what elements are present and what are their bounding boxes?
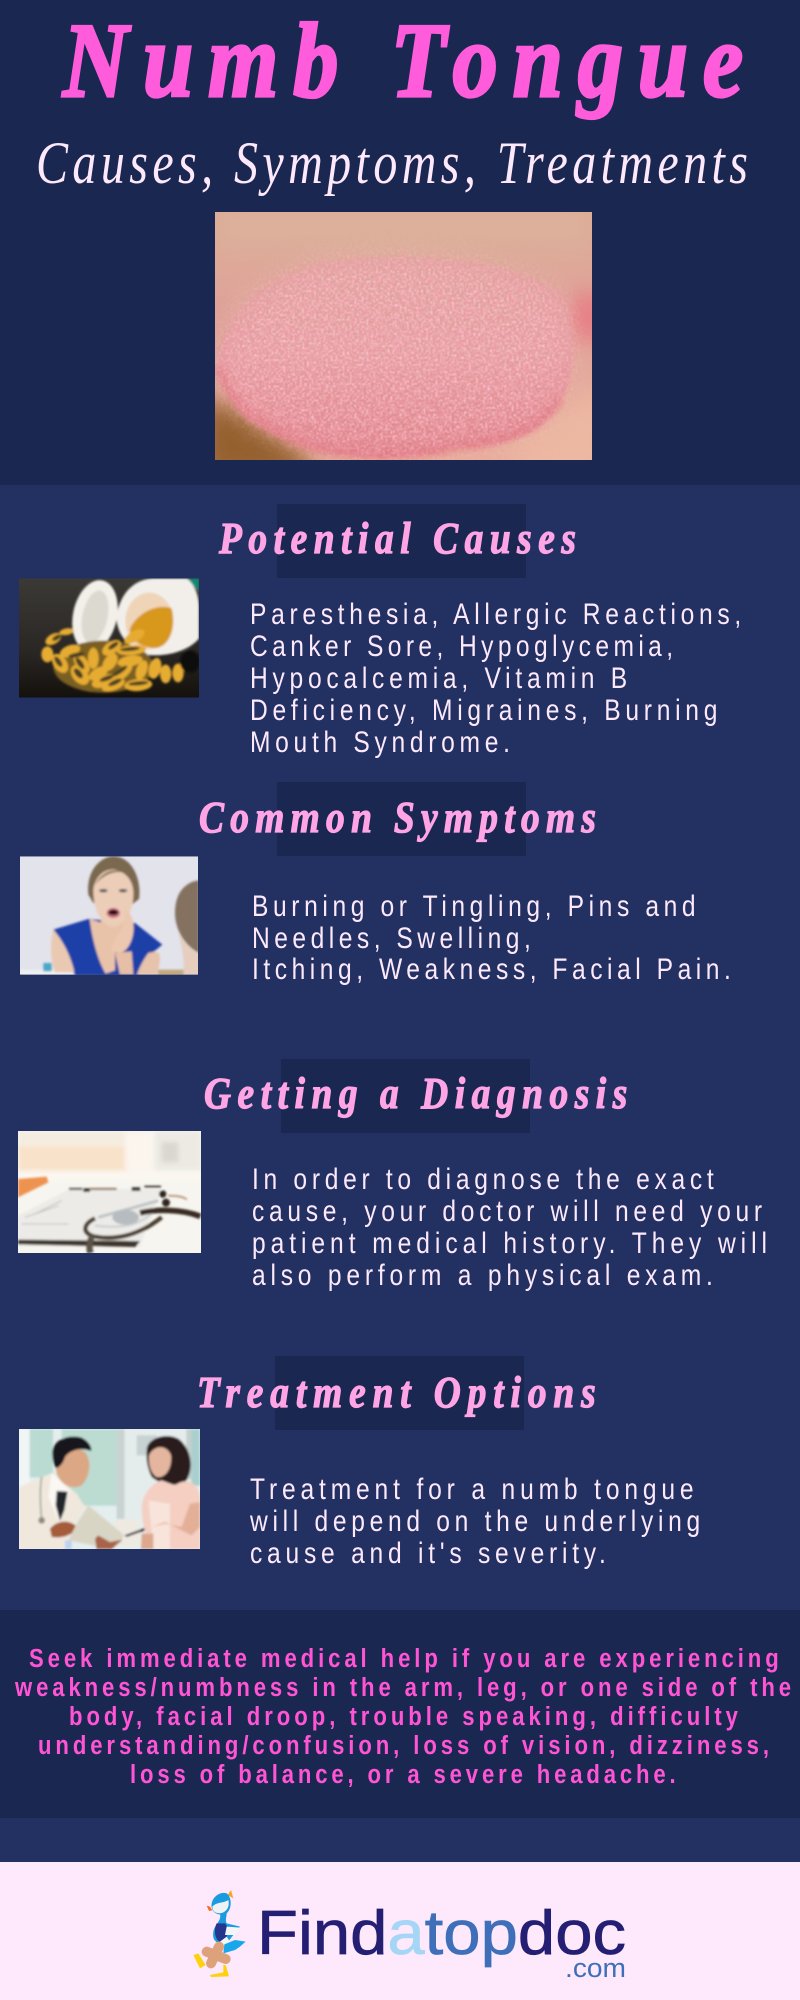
heading box (275, 1356, 524, 1430)
panel: warning (0, 1610, 800, 1818)
text: symptoms: Itching, Weakness, Facial Pain. (252, 952, 731, 986)
text: causes (250, 597, 741, 759)
header band (0, 0, 800, 485)
subtitle: Causes, Symptoms, Treatments (36, 130, 748, 196)
text: treatment (249, 1472, 700, 1570)
heading box (277, 504, 526, 578)
heading box (277, 782, 526, 856)
photo: woman with tooth pain (20, 856, 198, 975)
panel: warning: body, facial droop, trouble speaking, difficulty (69, 1702, 738, 1731)
heading: Treatment Options (197, 1368, 596, 1417)
section: getting a diagnosis (18, 1059, 767, 1292)
footer (0, 1862, 800, 2000)
logo .com: .com (565, 1953, 626, 1983)
text: diagnosis: also perform a physical exam. (252, 1258, 713, 1292)
text: diagnosis: In order to diagnose the exact (252, 1162, 714, 1196)
heading: Common Symptoms (199, 793, 596, 842)
photo: pills (19, 578, 199, 698)
heading box (281, 1059, 530, 1133)
heading: Potential Causes (218, 514, 576, 563)
logo wordmark: Findatopdoc (257, 1899, 626, 1968)
panel: warning: understanding/confusion, loss of vision, dizziness, (38, 1731, 769, 1760)
icon: duck mascot (193, 1890, 246, 1977)
text: treatment: Treatment for a numb tongue (250, 1472, 694, 1506)
text: causes: Mouth Syndrome. (250, 725, 510, 759)
text: symptoms: Needles, Swelling, (252, 921, 531, 955)
panel: warning: weakness/numbness in the arm, leg, or one side of the (14, 1673, 791, 1702)
text: diagnosis (252, 1162, 767, 1292)
text: causes: Canker Sore, Hypoglycemia, (250, 629, 673, 663)
photo: tongue (215, 212, 592, 460)
text: symptoms (252, 889, 731, 986)
text: causes: Hypocalcemia, Vitamin B (250, 661, 627, 695)
photo: stethoscope on clipboard (18, 1131, 201, 1253)
title: Numb Tongue (62, 2, 743, 120)
text: diagnosis: patient medical history. They will (252, 1226, 767, 1260)
section: potential causes (19, 504, 741, 759)
text: treatment: will depend on the underlying (249, 1504, 700, 1538)
text: causes: Paresthesia, Allergic Reactions, (250, 597, 741, 631)
text: symptoms: Burning or Tingling, Pins and (252, 889, 696, 923)
heading: Getting a Diagnosis (204, 1069, 627, 1118)
text: causes: Deficiency, Migraines, Burning (250, 693, 717, 727)
panel: warning: Seek immediate medical help if you are experiencing (29, 1644, 779, 1673)
panel: warning: loss of balance, or a severe headache. (130, 1760, 676, 1789)
text: treatment: cause and it's severity. (250, 1536, 606, 1570)
photo: doctor and patient (19, 1429, 200, 1549)
section: common symptoms (20, 782, 731, 986)
section: treatment options (19, 1356, 700, 1570)
text: diagnosis: cause, your doctor will need your (252, 1194, 762, 1228)
